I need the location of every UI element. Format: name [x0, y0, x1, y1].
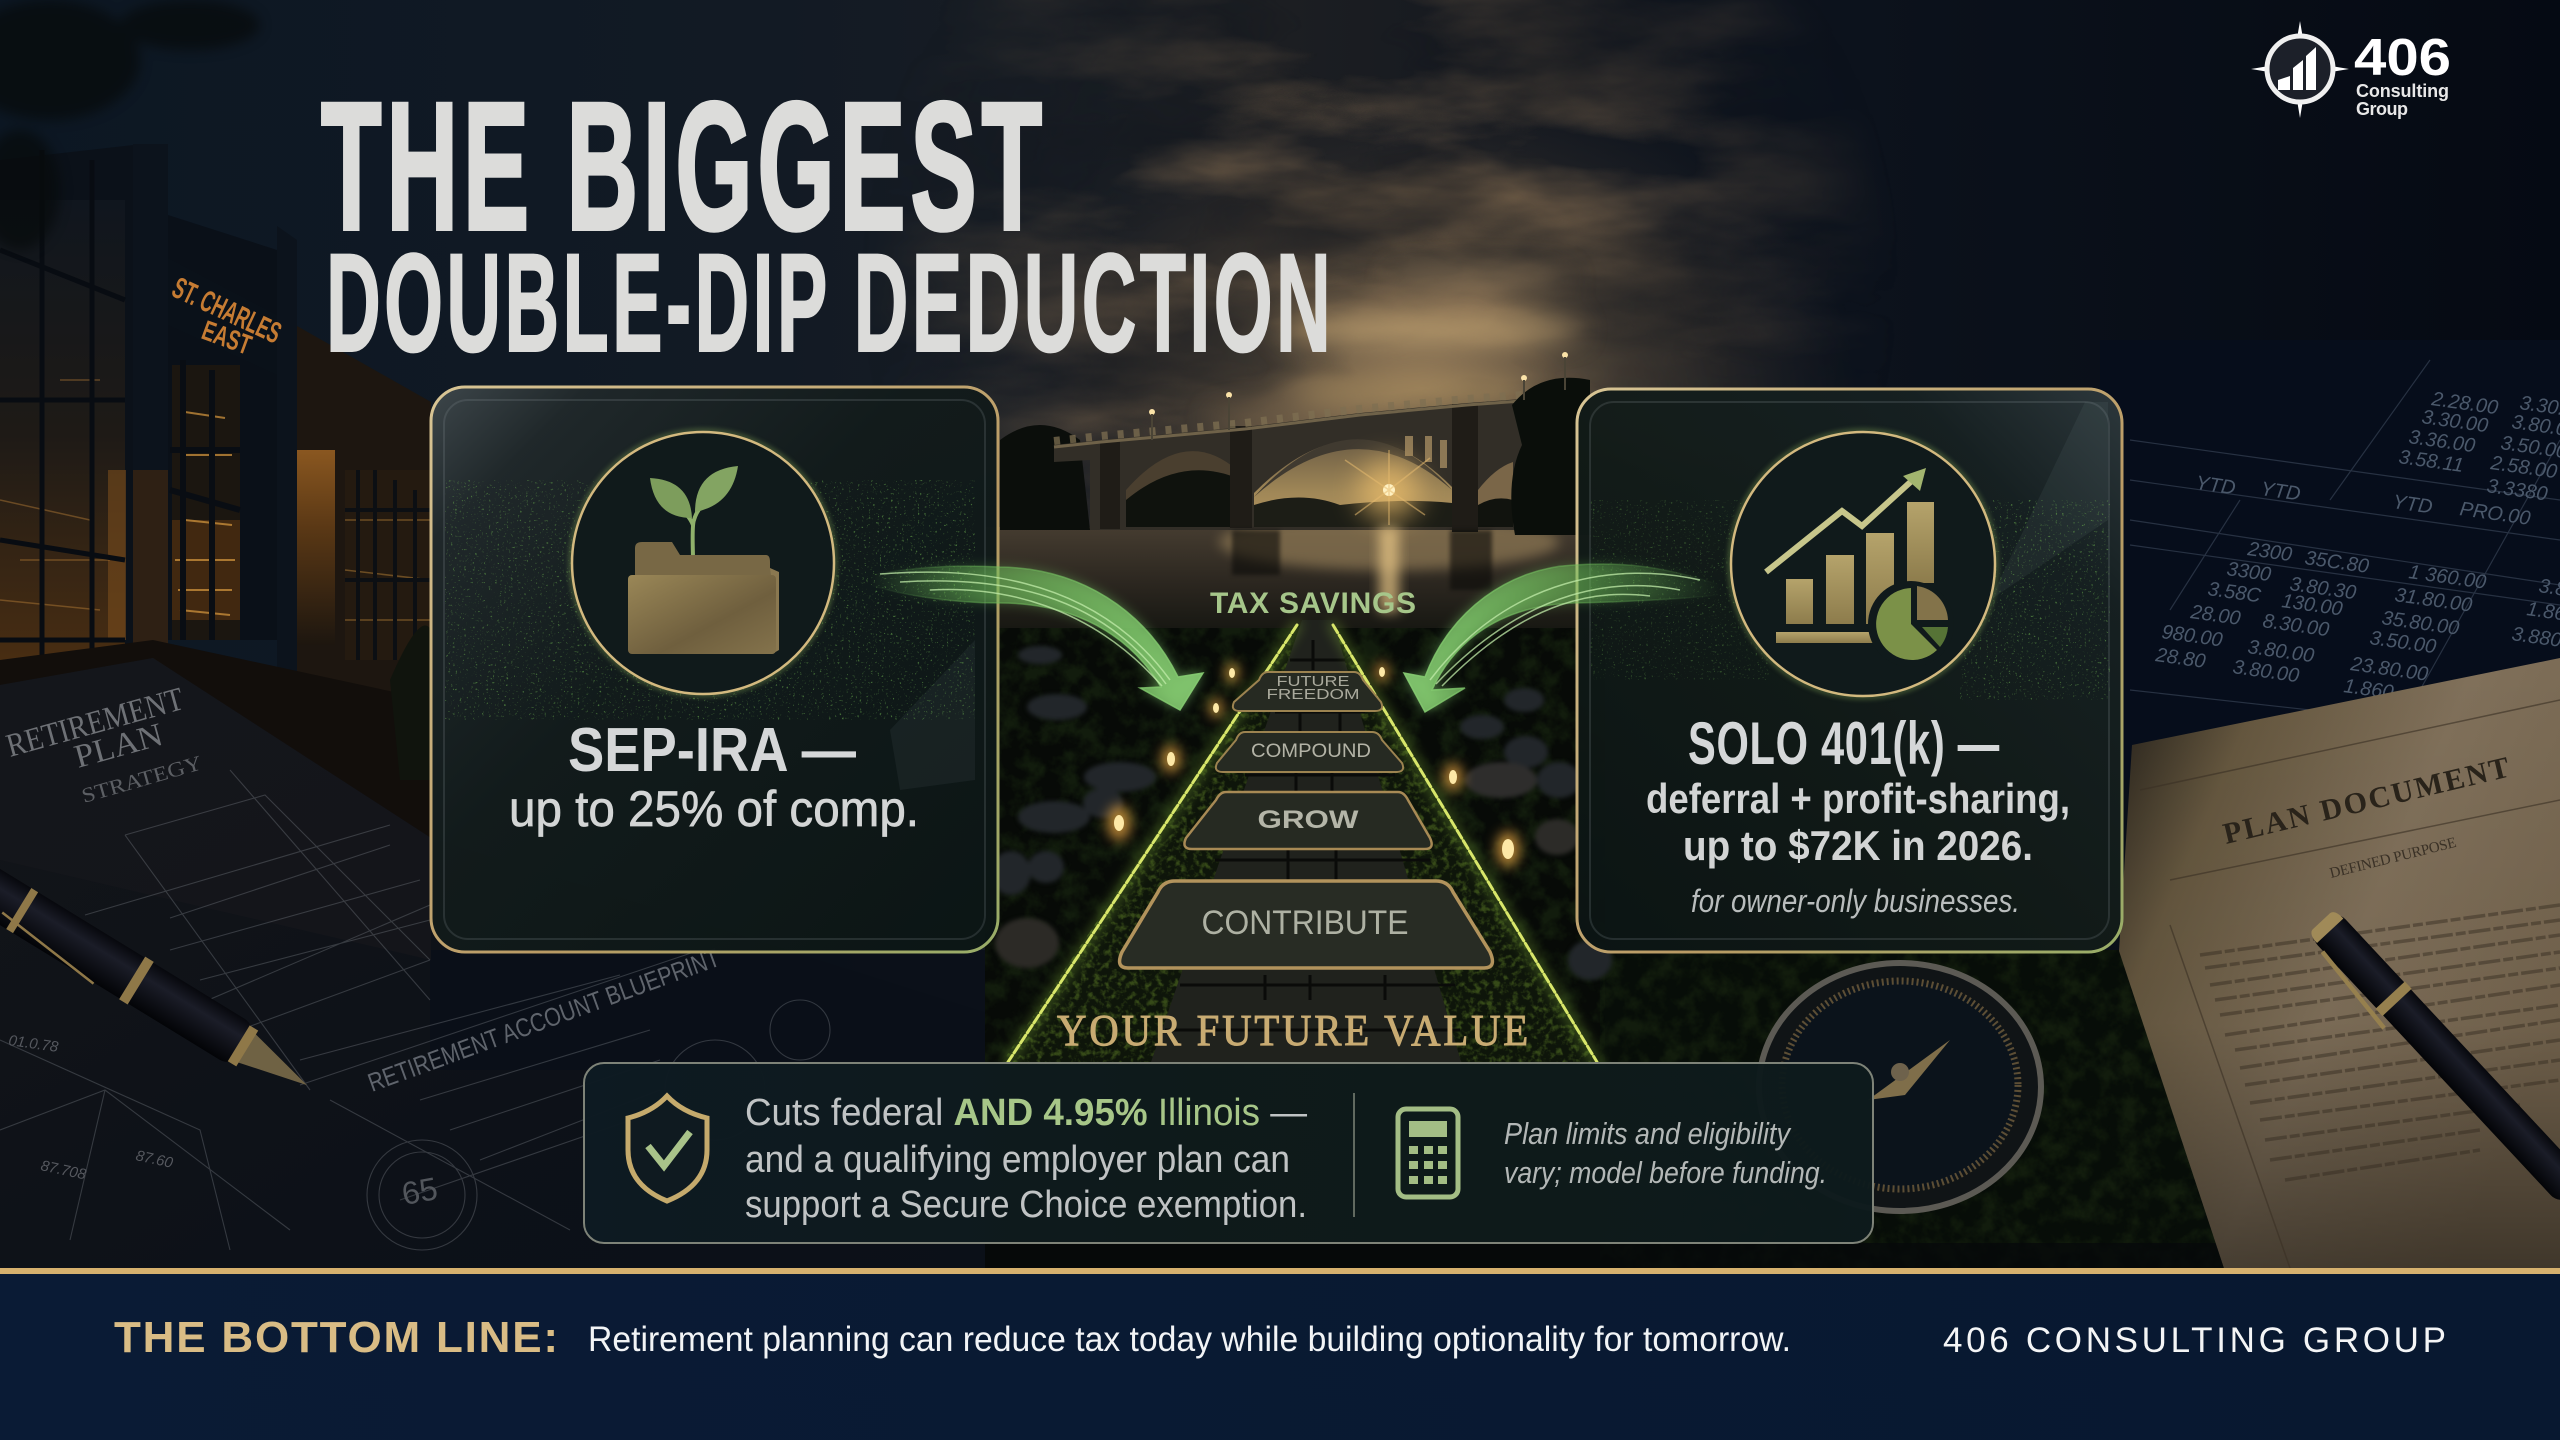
title: [321, 64, 1334, 381]
footer: brand: 406 CONSULTING GROUP: [1943, 1321, 2446, 1360]
sign: St. Charles East: ST. CHARLES: [167, 271, 286, 350]
text: federal and Illinois savings: [745, 1092, 1307, 1226]
background: right ledger table: 3.3380: [2485, 475, 2549, 505]
background: right ledger table: 980.00: [2160, 621, 2224, 651]
icon: rising bar chart with pie: [1731, 432, 1995, 696]
blueprint paper: retirement plan strategy: 65: [399, 1170, 440, 1212]
blueprint paper: retirement plan strategy: 87.60: [134, 1147, 175, 1172]
label: tax savings: TAX SAVINGS: [1210, 587, 1416, 620]
step: contribute: CONTRIBUTE: [1202, 904, 1408, 942]
background: right ledger table: [2100, 340, 2560, 780]
background: St. Charles East building: [0, 0, 431, 840]
background: right ledger table: 28.80: [2153, 644, 2207, 673]
background: right ledger table: 2.58.00: [2488, 452, 2558, 483]
card title: SEP-IRA —: [568, 716, 856, 785]
footer: bottom line label: THE BOTTOM LINE:: [114, 1313, 558, 1362]
blueprint paper: retirement plan strategy: 01.0.78: [7, 1032, 60, 1056]
background: right ledger table: 31.80.00: [2393, 584, 2473, 617]
background: right ledger table: 2300: [2245, 538, 2293, 566]
card detail: up to $72K in 2026.: [1683, 822, 2033, 869]
plan document paper with pen: PLAN DOCUMENT: [2220, 751, 2513, 851]
step: future freedom: FREEDOM: [1266, 686, 1360, 703]
blueprint paper: retirement plan strategy: RETIREMENT: [3, 681, 188, 765]
logo: 406 Consulting Group: 406: [2354, 29, 2451, 87]
card detail: [1646, 775, 2070, 869]
background: right ledger table: 3.80.00: [2231, 656, 2300, 687]
sign: St. Charles East: EAST: [198, 315, 256, 361]
background: right ledger table: 28.00: [2188, 601, 2242, 630]
background: right ledger table: 8.30.00: [2261, 610, 2330, 641]
bridge body: [1054, 398, 1536, 530]
step: future freedom: FUTURE: [1276, 673, 1350, 690]
lanterns: [1107, 662, 1520, 867]
background: right ledger table: 3.30.00: [2420, 406, 2489, 437]
background: right ledger table: 3.80.30: [2288, 573, 2357, 604]
text: federal and Illinois savings: support a Secure Choice exemption.: [745, 1184, 1307, 1226]
step: compound: COMPOUND: [1251, 741, 1371, 762]
footer: bottom line message: Retirement planning can reduce tax today while building optionality for tomorrow.: [588, 1320, 1791, 1359]
background: right ledger table: 3.36.00: [2407, 426, 2476, 457]
step: contribute: [1120, 881, 1492, 968]
background: right ledger table: 3.58.11: [2397, 446, 2465, 477]
card title: SOLO 401(k) —: [1688, 710, 2000, 777]
foliage and stone path scene: [985, 620, 2240, 1270]
blueprint paper: retirement plan strategy: PLAN: [71, 717, 167, 776]
logo: 406 Consulting Group: Group: [2356, 99, 2408, 119]
background: bridge over river at sunset: [985, 352, 1605, 637]
footer band: [0, 1268, 2560, 1440]
compass: [1759, 963, 2041, 1211]
plan document paper with pen: DEFINED PURPOSE: [2328, 835, 2458, 882]
background: right ledger table: YTD: [2259, 478, 2302, 506]
title: THE BIGGEST: [321, 64, 1047, 268]
text: federal and Illinois savings: and a qualifying employer plan can: [745, 1139, 1290, 1181]
arrow: right card to path: [1404, 564, 1720, 712]
panel: tax note strip: [584, 1063, 1873, 1243]
glowing path rails: [1008, 625, 1597, 1062]
icon: folder with sprout: [572, 432, 834, 694]
step: grow: [1184, 792, 1432, 849]
card note: for owner-only businesses.: [1691, 883, 2020, 919]
background: right ledger table: 130.00: [2280, 590, 2344, 620]
title: DOUBLE-DIP DEDUCTION: [326, 224, 1334, 381]
icon: compass chart mark: [2251, 21, 2349, 118]
background: right ledger table: 3.58C: [2206, 578, 2263, 607]
icon: calculator: [1398, 1109, 1458, 1197]
background: right ledger table: 3.80.00: [2246, 636, 2315, 667]
background: right ledger table: 2.28.00: [2429, 388, 2499, 419]
blueprint paper: retirement plan strategy: [0, 658, 1070, 1280]
background: right ledger table: 3300: [2225, 558, 2272, 586]
background: right ledger table: 23.80.00: [2348, 653, 2429, 686]
logo: 406 Consulting Group: Consulting: [2356, 81, 2449, 101]
background: right ledger table: YTD: [2194, 472, 2237, 500]
blueprint paper: retirement plan strategy: RETIREMENT ACCOUNT BLUEPRINT: [364, 942, 724, 1098]
step: compound: [1216, 732, 1403, 772]
blueprint paper: retirement plan strategy: STRATEGY: [79, 751, 205, 808]
background: dusk sky: [0, 0, 1884, 950]
step: grow: GROW: [1258, 806, 1359, 834]
panel: SEP-IRA card: [431, 387, 998, 952]
background: right ledger table: 35C.80: [2303, 547, 2370, 578]
background: right ledger table: 1 360.00: [2407, 561, 2487, 594]
text: plan limits caveat: vary; model before funding.: [1504, 1155, 1827, 1190]
text: plan limits caveat: [1504, 1116, 1827, 1190]
icon: pen on blueprint: [0, 860, 320, 1106]
background: right ledger table: 1.860: [2342, 675, 2395, 704]
sign: St. Charles East: [167, 271, 286, 361]
grass verges: [1000, 625, 1600, 1065]
plan document paper with pen: [2119, 658, 2560, 1268]
text: federal and Illinois savings: Cuts federal AND 4.95% Illinois —: [745, 1092, 1307, 1134]
icon: shield with check: [628, 1096, 707, 1201]
background: right ledger table: YTD: [2391, 491, 2434, 519]
stone walkway: [1150, 620, 1462, 1065]
background: right ledger table: 3.50.00: [2368, 627, 2437, 658]
card detail: deferral + profit-sharing,: [1646, 775, 2070, 822]
arrow: left card to path: [870, 566, 1203, 710]
background: right ledger table: PRO.00: [2458, 498, 2532, 530]
logo: 406 Consulting Group: [2251, 21, 2451, 119]
rocks: [991, 646, 1612, 980]
blueprint paper: retirement plan strategy: 87.708: [39, 1157, 88, 1184]
label: your future value: YOUR FUTURE VALUE: [1057, 1006, 1531, 1055]
card detail: up to 25% of comp.: [509, 781, 919, 837]
background: right ledger table: 35.80.00: [2380, 607, 2460, 640]
panel: Solo 401(k) card: [1577, 389, 2122, 952]
step: future freedom: [1233, 672, 1382, 711]
text: plan limits caveat: Plan limits and eligibility: [1504, 1116, 1792, 1151]
